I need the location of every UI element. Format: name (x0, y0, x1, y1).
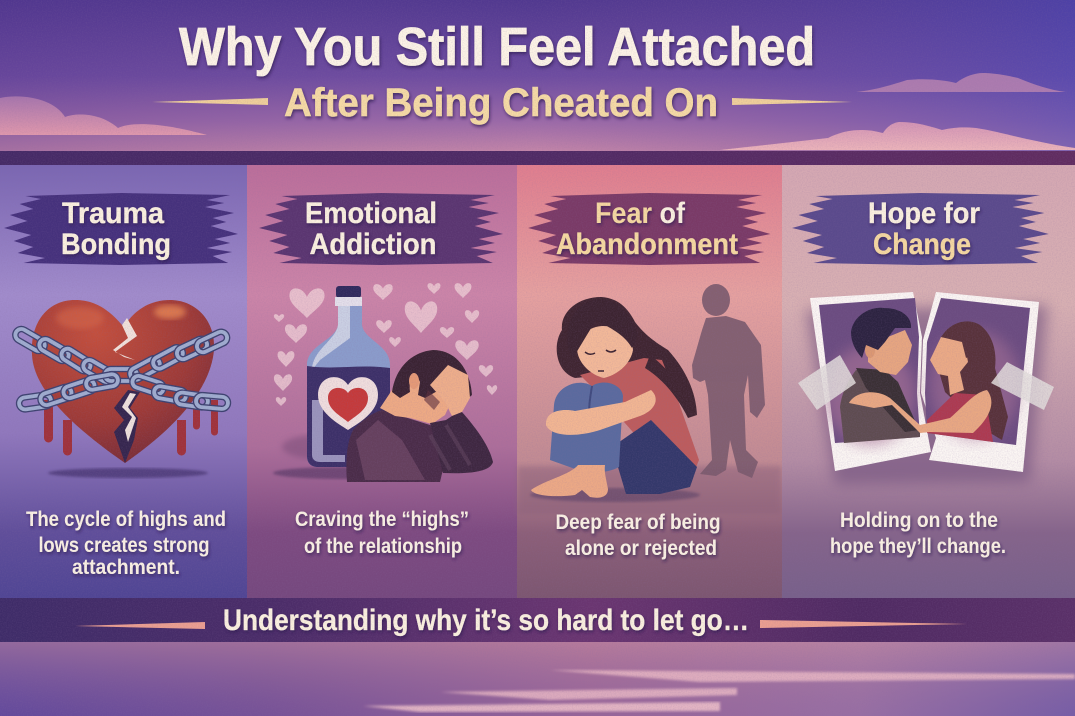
heading: hope for change (868, 197, 980, 261)
heading: trauma bonding (61, 197, 171, 261)
text: trauma bonding description: attachment. (72, 556, 180, 579)
text: emotional addiction description (295, 508, 469, 558)
banner: fear of abandonment (528, 193, 770, 265)
heading: fear of abandonment: Fear of (595, 197, 686, 230)
text: hope for change description: Holding on to the (840, 509, 998, 532)
banner: trauma bonding (4, 193, 238, 265)
text: trauma bonding description: The cycle of highs and (26, 508, 226, 531)
heading: hope for change: Change (873, 228, 971, 261)
text: hope for change description: hope they’ll change. (830, 535, 1006, 558)
text: trauma bonding description (26, 508, 226, 579)
heading: trauma bonding: Bonding (61, 228, 171, 261)
heading: fear of abandonment: Abandonment (556, 228, 738, 261)
header background (0, 0, 1075, 152)
heading: emotional addiction (305, 197, 437, 261)
title: Why You Still Feel Attached (179, 17, 815, 77)
icon: torn photo of couple (798, 292, 1054, 484)
top divider band (0, 151, 1075, 165)
subtitle with side rules (152, 81, 852, 125)
banner: emotional addiction (259, 193, 503, 265)
heading: hope for change: Hope for (868, 197, 980, 230)
text: trauma bonding description: lows creates strong (38, 534, 210, 557)
panel: trauma bonding (0, 165, 247, 598)
icon: man holding head (346, 350, 493, 482)
text: emotional addiction description: of the relationship (304, 535, 462, 558)
bottom background (0, 642, 1075, 716)
text: fear of abandonment description: alone or rejected (565, 537, 717, 560)
heading: emotional addiction: Addiction (310, 228, 436, 261)
icon: walking man silhouette (692, 284, 765, 478)
text: hope for change description (830, 509, 1006, 558)
icon: bottle with heart (273, 286, 417, 479)
panel: hope for change (782, 165, 1075, 598)
heading: fear of abandonment (556, 197, 738, 261)
footer band (0, 598, 1075, 642)
icon: floating hearts (274, 283, 497, 406)
banner: hope for change (792, 193, 1049, 265)
icon: chained broken heart (13, 300, 229, 478)
footer tagline: Understanding why it’s so hard to let go… (223, 604, 749, 637)
subtitle with side rules: After Being Cheated On (284, 81, 718, 125)
icon: sad girl sitting (530, 297, 700, 502)
text: fear of abandonment description (556, 511, 720, 560)
text: fear of abandonment description: Deep fear of being (556, 511, 720, 534)
panel: fear of abandonment (517, 165, 782, 598)
panel: emotional addiction (247, 165, 517, 598)
floor shading (517, 466, 782, 514)
text: emotional addiction description: Craving the “highs” (295, 508, 469, 531)
heading: emotional addiction: Emotional (305, 197, 437, 230)
heading: trauma bonding: Trauma (62, 197, 164, 230)
